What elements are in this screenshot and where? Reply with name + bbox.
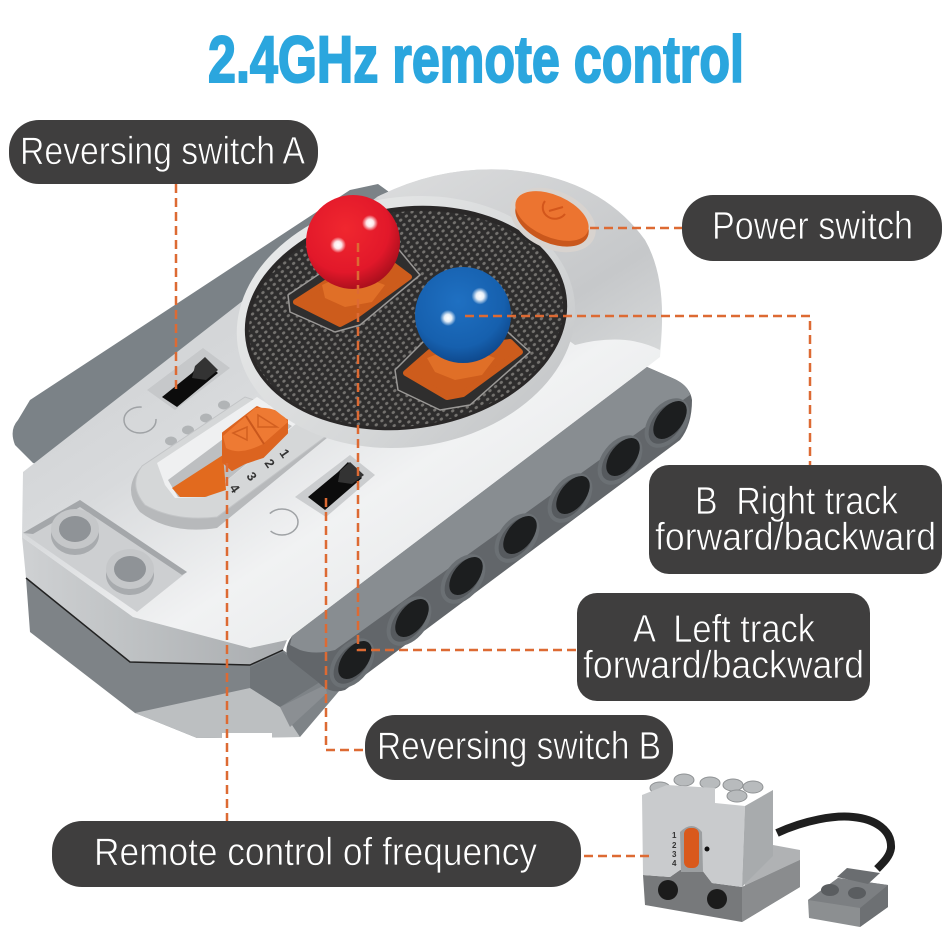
label: remote control of frequency (52, 821, 581, 887)
stud left (51, 515, 99, 555)
stick A tray (288, 245, 420, 332)
front bevel (22, 537, 287, 665)
numbers (672, 831, 677, 868)
cable (777, 817, 891, 869)
label: reversing switch A (9, 120, 318, 184)
label: reversing switch B (365, 715, 673, 780)
remote control device (13, 169, 696, 740)
frequency numbers: 4 (227, 481, 243, 496)
label: A left track (577, 593, 870, 701)
receiver module (642, 774, 891, 927)
stud right (106, 555, 154, 595)
stick A base (296, 265, 409, 324)
back connector (13, 184, 400, 470)
numbers: 3 (672, 850, 677, 859)
frequency numbers: 1 (277, 446, 293, 461)
frequency slider (131, 397, 333, 530)
label: remote control of frequency: Remote control of frequency (94, 831, 537, 874)
side beam (286, 367, 696, 693)
numbers: 1 (672, 831, 677, 840)
title: 2.4GHz remote control (208, 22, 744, 96)
numbers: 2 (672, 841, 677, 850)
stick B base (406, 342, 520, 397)
top plate (22, 169, 662, 648)
numbers: 4 (672, 859, 677, 868)
frequency numbers (227, 446, 293, 496)
blue ball (415, 267, 511, 363)
rotate icon A (124, 407, 156, 433)
socket holes (658, 880, 678, 900)
stick B tray (395, 325, 530, 410)
label: A left track: forward/backward (583, 644, 864, 687)
beam holes (323, 393, 696, 693)
switch B (266, 455, 375, 535)
red ball (306, 195, 400, 289)
oval top (377, 169, 662, 350)
control dial (220, 175, 592, 469)
label: reversing switch B: Reversing switch B (377, 725, 661, 768)
label: B right track (649, 465, 942, 574)
bottom notch (222, 733, 272, 740)
label: reversing switch A: Reversing switch A (20, 130, 305, 173)
label: A left track: A Left track (633, 608, 815, 651)
power button (500, 175, 606, 265)
beam hole interiors (332, 395, 693, 685)
leader lines (176, 184, 810, 856)
small connector (808, 878, 888, 927)
frequency numbers: 2 (262, 456, 278, 471)
rotate icon B (266, 509, 298, 535)
studs (650, 774, 763, 802)
stud panel (23, 500, 187, 612)
LED dots (165, 400, 230, 446)
slider window (680, 826, 703, 872)
label: power switch (682, 195, 942, 261)
rear step (745, 845, 800, 887)
box (642, 785, 745, 887)
lower body (26, 578, 340, 738)
base (643, 860, 800, 922)
label: power switch: Power switch (712, 205, 913, 248)
label: B right track: B Right track (695, 480, 898, 523)
frequency numbers: 3 (244, 469, 260, 484)
switch A (124, 348, 230, 433)
